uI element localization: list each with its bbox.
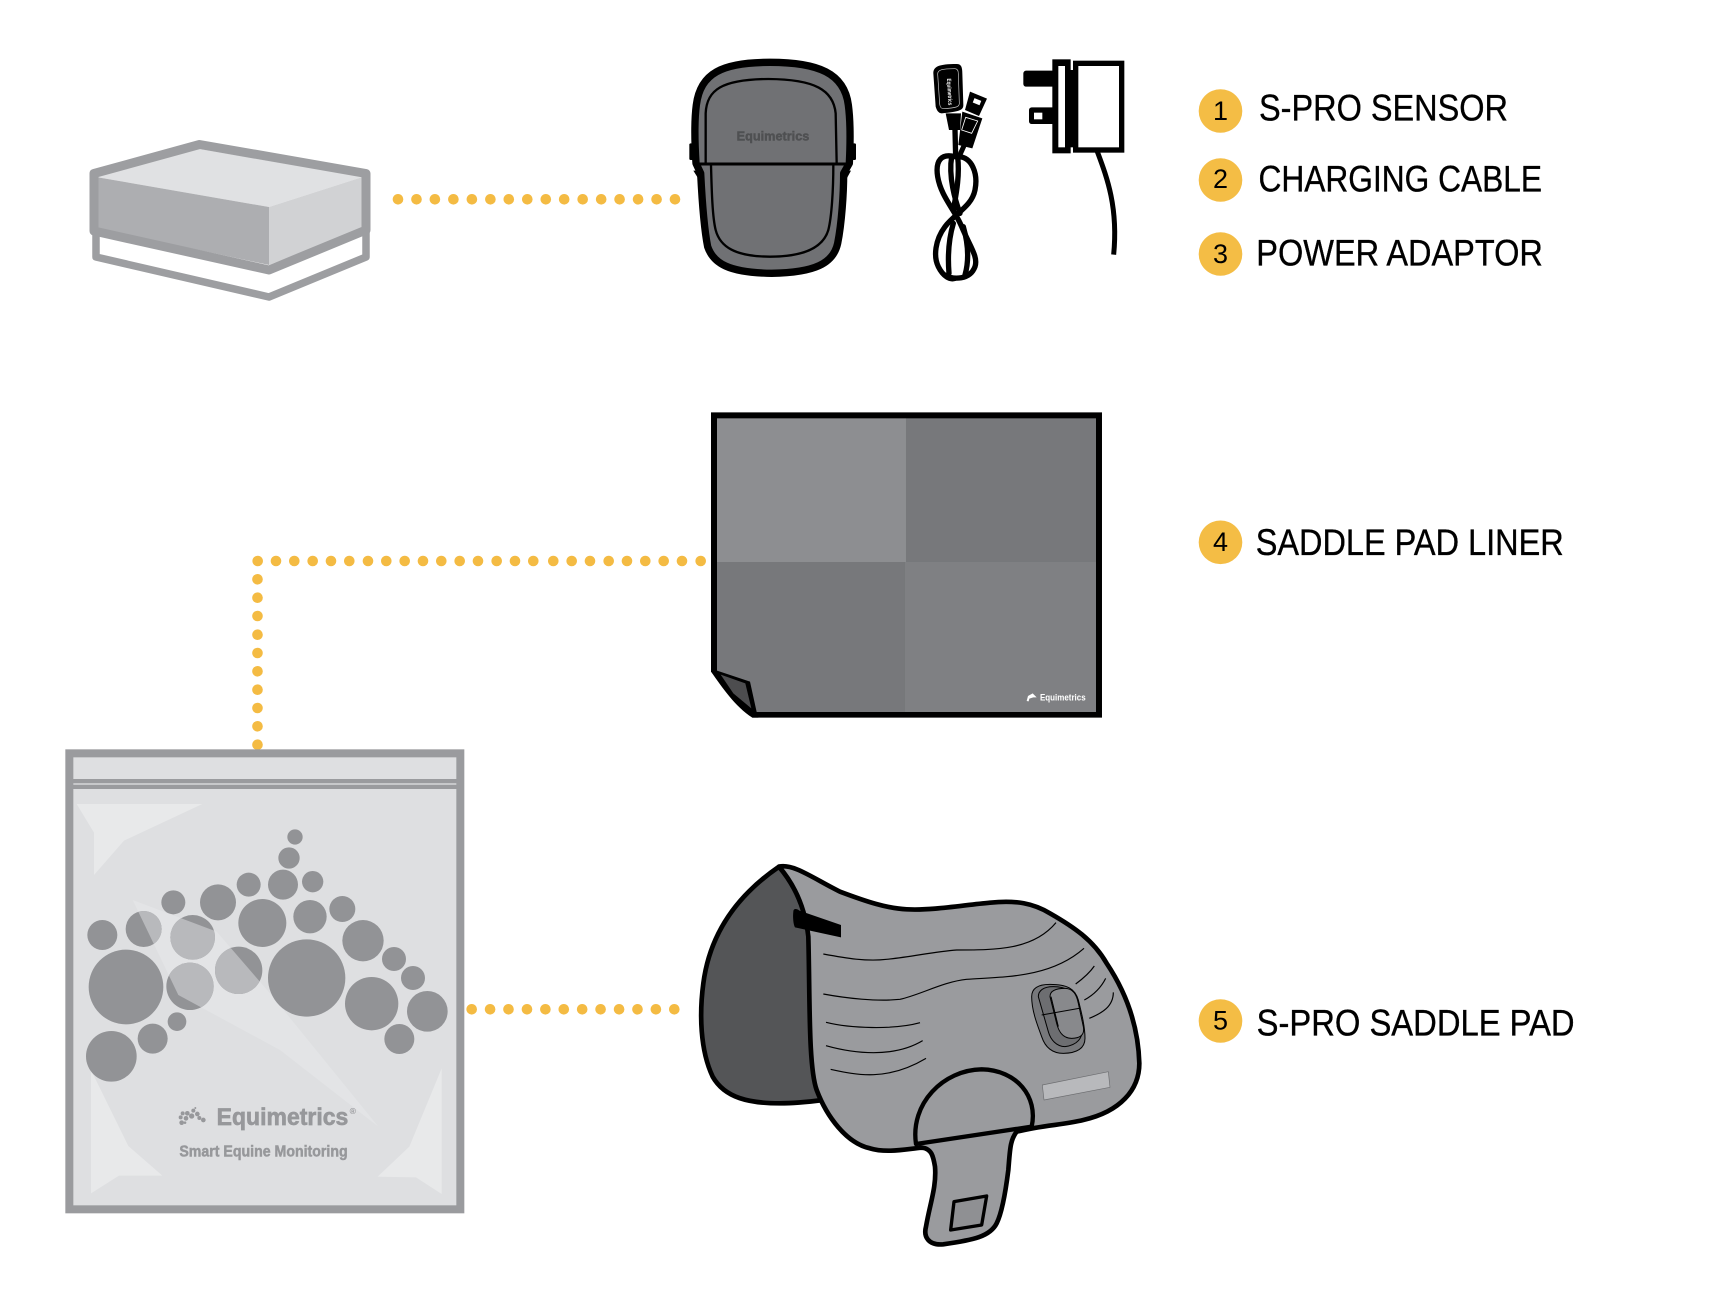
sensor pocket: [1032, 984, 1085, 1053]
registered mark: ®: [350, 1106, 357, 1116]
label 3: power adaptor: 3: [1213, 239, 1228, 269]
cable head logo text: Equimetrics: [945, 78, 952, 106]
icon: sensor carry case: [689, 62, 856, 273]
panel: resealable bag: [69, 753, 460, 1209]
girth strap tab window: [951, 1196, 987, 1230]
icon: gift box: [94, 144, 366, 297]
label 2: charging cable: [1199, 158, 1542, 202]
box lid: [94, 144, 366, 270]
icon: saddle pad liner: [711, 412, 1102, 718]
icon: S-PRO saddle pad: [701, 866, 1139, 1244]
pad label patch: [1042, 1072, 1110, 1100]
liner logo: Equimetrics: [1040, 693, 1086, 703]
label 5: S-PRO saddle pad: S-PRO SADDLE PAD: [1257, 1003, 1575, 1044]
label 2: charging cable: 2: [1213, 164, 1228, 194]
label 3: power adaptor: POWER ADAPTOR: [1256, 233, 1543, 274]
label 4: saddle pad liner: 4: [1213, 527, 1228, 557]
label 1: S-PRO sensor: S-PRO SENSOR: [1259, 88, 1508, 129]
case logo text: Equimetrics: [737, 129, 809, 144]
bag tagline: Smart Equine Monitoring: [179, 1144, 348, 1161]
box base: [96, 232, 366, 297]
bag brand name: Equimetrics: [217, 1104, 348, 1131]
quilting lines: [823, 923, 1113, 1075]
saddle pad underside: [701, 867, 823, 1103]
label 2: charging cable: CHARGING CABLE: [1258, 159, 1542, 200]
dotted connector: bag to saddle pad liner: [252, 556, 706, 750]
icon: charging cable: [933, 64, 987, 279]
label 1: S-PRO sensor: [1199, 88, 1508, 133]
dotted connector: box to sensor case: [393, 194, 680, 205]
bag logo mark: [179, 1107, 206, 1125]
label 1: S-PRO sensor: 1: [1213, 96, 1228, 126]
saddle pad body: [779, 866, 1139, 1244]
label 5: S-PRO saddle pad: 5: [1213, 1006, 1228, 1036]
girth arch: [915, 1069, 1033, 1144]
horse logo dots: [86, 829, 448, 1082]
black strap: [793, 909, 841, 937]
icon: power adaptor: [1023, 59, 1122, 255]
liner logo: [1027, 693, 1086, 703]
label 4: saddle pad liner: SADDLE PAD LINER: [1256, 522, 1564, 563]
dotted connector: bag to saddle pad: [466, 1004, 680, 1015]
